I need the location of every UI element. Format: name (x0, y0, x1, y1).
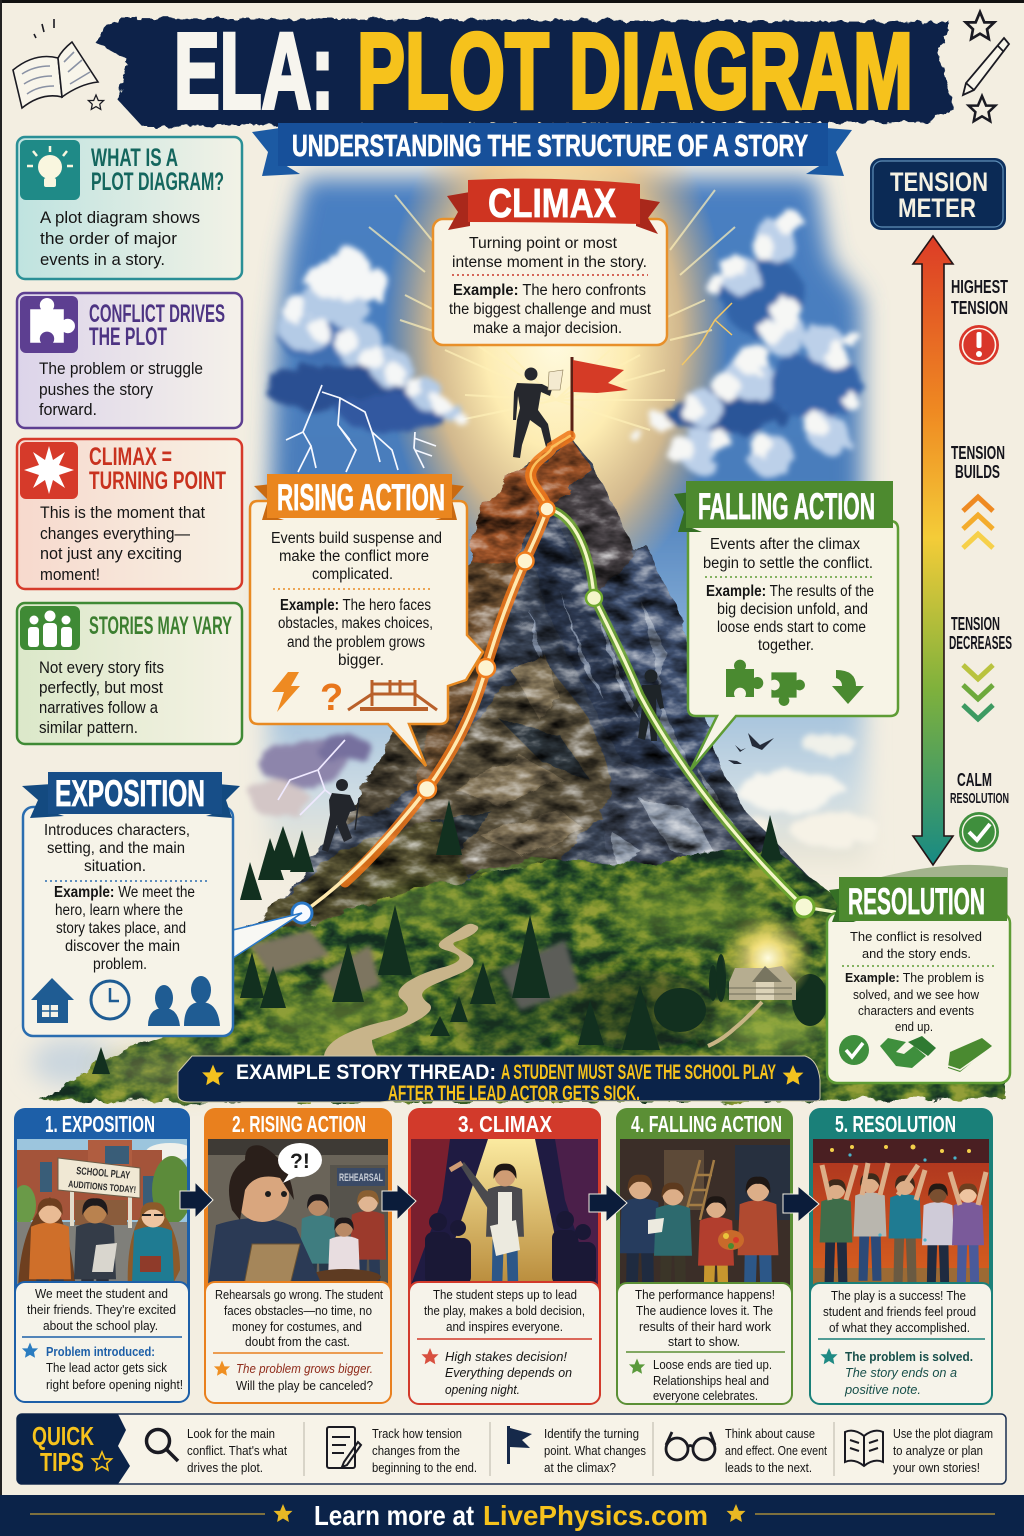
card heading: 5. RESOLUTION (835, 1111, 956, 1137)
falling action text: together. (758, 637, 814, 654)
storm clouds: left (263, 246, 468, 432)
icon: group of people (20, 606, 80, 650)
exposition banner (22, 772, 240, 818)
quick tips label: QUICK (32, 1421, 94, 1451)
icon: magnifying glass (146, 1430, 178, 1461)
icon: notepad and pencil (327, 1427, 361, 1468)
icon: starburst (20, 442, 78, 499)
rising action text: and the problem grows (287, 634, 425, 651)
icon: falling chevrons (963, 665, 993, 719)
tip: track tension: Track how tension (372, 1426, 462, 1441)
card heading: 1. EXPOSITION (45, 1111, 155, 1137)
icon: lightbulb (20, 140, 80, 200)
exposition text: hero, learn where the (55, 902, 183, 919)
illustration: student in the spotlight (411, 1139, 598, 1288)
body text: similar pattern. (39, 718, 138, 737)
card text panel: The performance happens! (635, 1287, 775, 1302)
body text: Not every story fits (39, 658, 164, 677)
title banner (95, 10, 954, 131)
card text panel: The audience loves it. The (636, 1303, 773, 1318)
tip: cause and effect: leads to the next. (725, 1460, 812, 1475)
icon: pencil and stars doodle (963, 12, 1009, 121)
body text (39, 658, 164, 737)
icon: lightning bolt (272, 672, 300, 712)
story card 5: resolution (809, 1108, 993, 1404)
callout: climax (433, 179, 667, 345)
meter heading: TENSION (890, 167, 988, 197)
falling action text (703, 536, 875, 654)
heading: STORIES MAY VARY (89, 612, 232, 640)
icon: clock (91, 981, 129, 1019)
body text: pushes the story (39, 380, 153, 399)
icon: book (948, 1038, 992, 1072)
rock outcrops in foothills (250, 930, 580, 1010)
quick tips strip (17, 1414, 1006, 1484)
body text: A plot diagram shows (40, 208, 200, 227)
card text panel: money for costumes, and (232, 1319, 362, 1334)
climax text: Turning point or most (469, 235, 618, 252)
plot line: falling action (547, 509, 804, 907)
rising action banner: RISING ACTION (277, 477, 445, 518)
label: calm resolution (950, 770, 1009, 807)
lightning (278, 303, 732, 815)
icon: two people (148, 976, 220, 1026)
exposition text: problem. (93, 956, 147, 973)
tip: track tension: changes from the (372, 1443, 460, 1458)
torn navy backing (95, 18, 954, 126)
card text panel (15, 1282, 189, 1402)
meter heading (870, 158, 1006, 230)
card text panel: right before opening night! (46, 1377, 183, 1392)
icon: check circle (839, 1035, 869, 1065)
banner text: AFTER THE LEAD ACTOR GETS SICK. (388, 1082, 640, 1105)
heading (89, 443, 226, 495)
card text panel: We meet the student and (35, 1286, 168, 1301)
rising action text (271, 530, 442, 669)
body text: the order of major (40, 229, 177, 248)
resolution text: The conflict is resolved (850, 929, 982, 944)
panel: stories may vary (17, 603, 242, 744)
story card 1: exposition (12, 1108, 194, 1402)
label: highest tension (951, 277, 1008, 318)
footer text: LivePhysics.com (483, 1500, 708, 1531)
mountain body (240, 436, 824, 970)
tip: find the conflict (146, 1426, 287, 1475)
card heading: 3. CLIMAX (458, 1111, 553, 1137)
climax text: Example: The hero confronts (453, 282, 646, 299)
body text: perfectly, but most (39, 678, 163, 697)
body text: narratives follow a (39, 698, 158, 717)
plot nodes (292, 502, 814, 923)
card text panel: student and friends feel proud (823, 1304, 976, 1319)
falling action banner (674, 481, 893, 532)
pine trees (92, 800, 828, 1074)
card text panel (810, 1283, 992, 1404)
icon: curved down arrow (832, 670, 864, 704)
story card 4: falling action (616, 1108, 793, 1404)
falling action text: Events after the climax (710, 536, 860, 553)
resolution text (842, 929, 995, 1034)
card text panel: positive note. (844, 1382, 921, 1397)
icon: puzzle piece (20, 296, 78, 353)
double-headed gradient arrow (913, 236, 953, 865)
card text panel: of what they accomplished. (829, 1320, 970, 1335)
marquee sign (58, 1158, 140, 1198)
figures on the mountain (322, 357, 774, 852)
resolution text: end up. (895, 1019, 933, 1034)
resolution text: characters and events (858, 1003, 974, 1018)
tip: identify the turning point: Identify the turning (544, 1426, 639, 1441)
body text: moment! (40, 565, 100, 584)
tip: find the conflict: Look for the main (187, 1426, 275, 1441)
arrow: card 3 to 4 (589, 1184, 627, 1222)
card text panel: the play, makes a bold decision, (424, 1303, 585, 1318)
tip: use the diagram: your own stories! (893, 1460, 980, 1475)
climax text: make a major decision. (473, 320, 622, 337)
panel: what is a plot diagram (17, 137, 242, 279)
rising action text: Example: The hero faces (280, 597, 431, 614)
heading: THE PLOT (89, 323, 167, 351)
falling action text: big decision unfold, and (717, 601, 868, 618)
icon: bridge (348, 680, 437, 710)
tip: track tension: beginning to the end. (372, 1460, 477, 1475)
card text panel: opening night. (445, 1382, 520, 1397)
card text panel: The story ends on a (845, 1365, 957, 1380)
panel: climax is the turning point (17, 439, 242, 589)
card text panel: The problem is solved. (845, 1349, 973, 1364)
icon: rising chevrons (963, 497, 993, 548)
heading (91, 144, 224, 196)
arrow: card 2 to 3 (382, 1184, 416, 1220)
label: tension builds: BUILDS (955, 462, 1000, 482)
foliage light and shade (100, 880, 820, 1090)
falling action text: loose ends start to come (717, 619, 866, 636)
rehearsal sign: REHEARSAL (339, 1172, 383, 1184)
climax text (449, 235, 652, 337)
icon: glasses (666, 1432, 715, 1460)
rising action text: complicated. (312, 566, 393, 583)
heading: WHAT IS A (91, 144, 178, 172)
body text: The problem or struggle (39, 359, 203, 378)
exposition text: situation. (84, 858, 146, 875)
marquee sign: SCHOOL PLAY (76, 1165, 131, 1182)
sky (268, 178, 866, 865)
footer stars (274, 1504, 292, 1522)
rising action text: obstacles, makes choices, (278, 615, 433, 632)
panel: conflict drives the plot (17, 293, 242, 428)
thought bubble (278, 1143, 322, 1183)
mountain (240, 436, 824, 970)
heading: PLOT DIAGRAM? (91, 168, 224, 196)
distant right hill (870, 865, 1008, 920)
tension meter (870, 158, 1012, 865)
tip: cause and effect (666, 1426, 827, 1475)
school and sunset (708, 912, 814, 1046)
card text panel: The lead actor gets sick (46, 1360, 167, 1375)
exposition text: discover the main (65, 938, 180, 955)
body text: events in a story. (40, 250, 165, 269)
stars (202, 1064, 224, 1085)
exposition text (44, 822, 210, 973)
body text (40, 503, 205, 584)
card text panel: The play is a success! The (831, 1288, 966, 1303)
card heading: 4. FALLING ACTION (631, 1111, 782, 1137)
story card 3: climax (408, 1108, 601, 1404)
callout: falling action (674, 481, 898, 771)
flag (570, 357, 574, 437)
climax banner: CLIMAX (488, 180, 616, 226)
card text panel (409, 1282, 600, 1404)
illustration: story mountain scene (30, 65, 1008, 1102)
footer text (314, 1500, 708, 1531)
card text panel: Loose ends are tied up. (653, 1357, 772, 1372)
label: tension decreases (949, 614, 1012, 653)
icon: alert (959, 325, 999, 365)
falling action text: Example: The results of the (706, 583, 874, 600)
descending figure (632, 670, 664, 741)
footer text: Learn more at (314, 1500, 474, 1531)
marquee sign: AUDITIONS TODAY! (68, 1179, 136, 1196)
example story thread banner (178, 1056, 820, 1105)
body text (40, 208, 200, 269)
exposition banner: EXPOSITION (55, 773, 205, 814)
ground foliage (40, 850, 1005, 1102)
heading: CONFLICT DRIVES (89, 300, 225, 328)
tip: identify the turning point (507, 1426, 646, 1475)
callout: rising action (250, 474, 483, 766)
tip: find the conflict: conflict. That's what (187, 1443, 287, 1458)
plot line: rising action (302, 436, 835, 913)
students (18, 1197, 180, 1284)
body text: forward. (39, 400, 97, 419)
card text panel: faces obstacles—no time, no (224, 1303, 372, 1318)
tip: cause and effect: Think about cause (725, 1426, 815, 1441)
card text panel: Will the play be canceled? (236, 1378, 373, 1393)
subtitle ribbon (252, 123, 852, 176)
card text panel: High stakes decision! (445, 1349, 567, 1364)
banner text: A STUDENT MUST SAVE THE SCHOOL PLAY (501, 1061, 776, 1084)
title text: ELA: (174, 10, 334, 131)
body text: not just any exciting (40, 544, 182, 563)
card text panel: start to show. (668, 1334, 740, 1349)
tip: cause and effect: and effect. One event (725, 1443, 827, 1458)
banner text (236, 1061, 776, 1105)
rising action text: Events build suspense and (271, 530, 442, 547)
meter heading: METER (898, 193, 976, 223)
card text panel: The problem grows bigger. (236, 1361, 373, 1376)
exposition text: Introduces characters, (44, 822, 190, 839)
card text panel (205, 1282, 391, 1403)
card text panel: results of their hard work (639, 1319, 771, 1334)
tip: identify the turning point: at the climax? (544, 1460, 616, 1475)
rising action text: bigger. (338, 652, 384, 669)
title text (174, 10, 913, 131)
hiker (322, 779, 359, 852)
pale clouds lower left and lower right (250, 735, 879, 848)
heading: CLIMAX = (89, 443, 172, 471)
card text panel: Relationships heal and (653, 1373, 769, 1388)
arrow: card 4 to 5 (783, 1186, 819, 1222)
rising action text: make the conflict more (279, 548, 429, 565)
card text panel (617, 1283, 792, 1404)
heading (89, 300, 225, 351)
subtitle ribbon: UNDERSTANDING THE STRUCTURE OF A STORY (292, 128, 808, 163)
quick tips label: TIPS (40, 1447, 84, 1477)
illustration: rehearsal trouble (208, 1139, 388, 1284)
heading: TURNING POINT (89, 467, 226, 495)
banner text: EXAMPLE STORY THREAD: (236, 1061, 496, 1084)
tip: identify the turning point: point. What changes (544, 1443, 646, 1458)
icon: check (959, 812, 999, 852)
callout: exposition (22, 772, 302, 1036)
falling action text: begin to settle the conflict. (703, 555, 873, 572)
tip: find the conflict: drives the plot. (187, 1460, 263, 1475)
tip: track tension (327, 1426, 477, 1475)
body text: changes everything— (40, 524, 190, 543)
rehearsal sign (337, 1168, 385, 1186)
label: tension builds (951, 443, 1005, 482)
tip: use the diagram: to analyze or plan (893, 1443, 983, 1458)
hero on summit (513, 368, 552, 458)
illustration: school with three students (17, 1139, 187, 1284)
arrow: card 1 to 2 (180, 1182, 213, 1218)
card text panel: doubt from the cast. (245, 1334, 350, 1349)
callout: resolution (827, 877, 1010, 1083)
resolution text: solved, and we see how (853, 987, 980, 1002)
card text panel: The student steps up to lead (433, 1287, 577, 1302)
icon: flag (507, 1426, 532, 1464)
tip: use the diagram: Use the plot diagram (893, 1426, 993, 1441)
icon: handshake (880, 1036, 936, 1068)
card text panel: Rehearsals go wrong. The student (215, 1287, 383, 1302)
card text panel: Problem introduced: (46, 1344, 155, 1359)
illustration: after the show backstage (620, 1139, 790, 1285)
card heading: 2. RISING ACTION (232, 1111, 366, 1137)
climax banner (447, 179, 660, 234)
icon: puzzle pieces (726, 660, 805, 706)
rising action banner (254, 474, 464, 520)
icon: house (31, 978, 74, 1023)
climax text: the biggest challenge and must (449, 301, 652, 318)
storm clouds: right (629, 209, 863, 477)
card text panel: their friends. They're excited (27, 1302, 176, 1317)
resolution text: Example: The problem is (845, 970, 984, 985)
illustration: cast celebrating on stage (813, 1139, 989, 1288)
story card 2: rising action (204, 1108, 392, 1403)
card text panel: about the school play. (43, 1318, 158, 1333)
card text panel: and inspires everyone. (446, 1319, 563, 1334)
exposition text: story takes place, and (56, 920, 186, 937)
icon: open book doodle (13, 19, 104, 109)
sun rays (369, 190, 735, 430)
exposition text: setting, and the main (47, 840, 185, 857)
quick tips label (17, 1414, 130, 1484)
falling action banner: FALLING ACTION (698, 486, 875, 527)
body text (39, 359, 203, 419)
exposition text: Example: We meet the (54, 884, 195, 901)
tip: use the diagram (845, 1426, 993, 1475)
body text: This is the moment that (40, 503, 205, 522)
sunburst glow behind the peak (384, 65, 728, 605)
footer (0, 1495, 1024, 1536)
card text panel: everyone celebrates. (653, 1388, 758, 1403)
label: calm resolution: CALM (957, 770, 992, 790)
icon: question mark: ? (320, 677, 343, 719)
card text panel: Everything depends on (445, 1365, 572, 1380)
climax text: intense moment in the story. (452, 254, 647, 271)
icon: open book (845, 1431, 883, 1466)
birds (728, 733, 774, 764)
resolution text: and the story ends. (862, 946, 971, 961)
dirt path (324, 924, 478, 1056)
thought bubble: ?! (290, 1150, 310, 1173)
